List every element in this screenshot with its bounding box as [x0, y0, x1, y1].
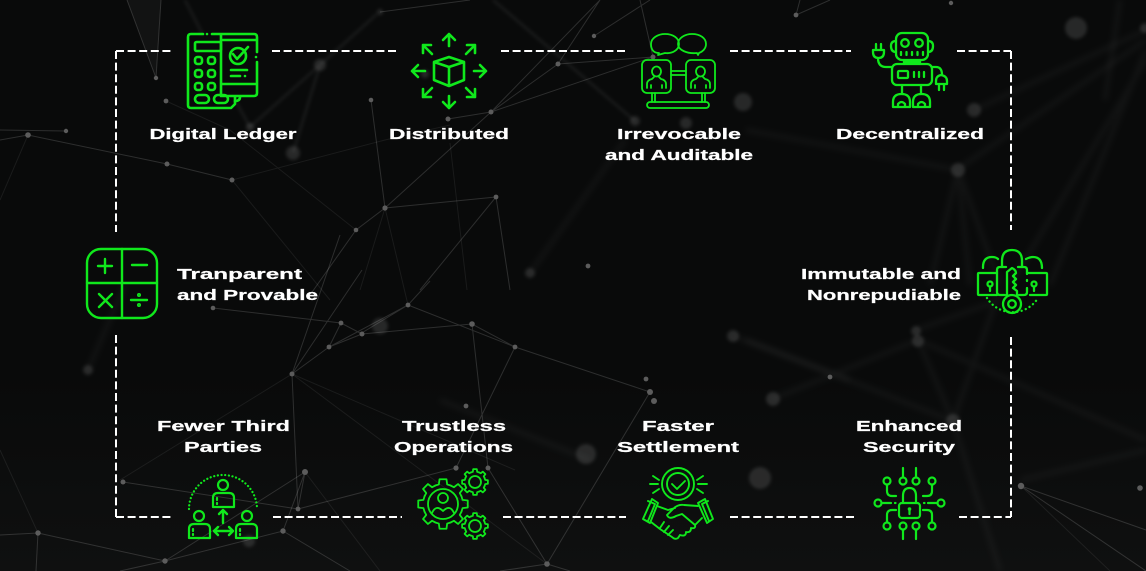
label: Immutable and Nonrepudiable: Nonrepudiable	[807, 288, 961, 304]
icon: locks and key	[978, 250, 1047, 313]
label: Tranparent and Provable: Tranparent	[177, 267, 302, 283]
label: Enhanced Security: Enhanced	[856, 419, 962, 435]
icon: circuit padlock	[874, 468, 944, 539]
label: Tranparent and Provable	[177, 267, 318, 304]
icon: robot	[873, 33, 947, 107]
icon: distributed cube	[412, 34, 486, 108]
label: Digital Ledger: Digital Ledger	[150, 127, 297, 143]
label: Irrevocable and Auditable: Irrevocable	[617, 127, 741, 143]
icon: people talking at table	[642, 34, 715, 108]
label: Irrevocable and Auditable	[605, 127, 753, 164]
icon: gears with person	[418, 469, 488, 539]
label: Faster Settlement: Settlement	[617, 440, 739, 456]
label: Irrevocable and Auditable: and Auditable	[605, 148, 753, 164]
icon: calculator symbols	[87, 249, 157, 318]
label: Faster Settlement: Faster	[642, 419, 715, 435]
label: Fewer Third Parties	[157, 419, 290, 456]
label: Trustless Operations: Trustless	[402, 419, 506, 435]
label: Enhanced Security	[856, 419, 962, 456]
label: Decentralized: Decentralized	[836, 127, 984, 143]
label: Tranparent and Provable: and Provable	[177, 288, 318, 304]
dashed frame	[116, 51, 1011, 517]
icon: three people	[189, 475, 257, 538]
label: Trustless Operations	[394, 419, 513, 456]
icon: handshake with badge	[643, 468, 713, 539]
label: Fewer Third Parties: Fewer Third	[157, 419, 290, 435]
label: Immutable and Nonrepudiable	[801, 267, 961, 304]
icon: digital ledger	[188, 33, 257, 108]
label: Fewer Third Parties: Parties	[184, 440, 262, 456]
label: Enhanced Security: Security	[863, 440, 955, 456]
label: Faster Settlement	[617, 419, 739, 456]
label: Distributed: Distributed	[389, 127, 509, 143]
label: Immutable and Nonrepudiable: Immutable and	[801, 267, 961, 283]
label: Trustless Operations: Operations	[394, 440, 513, 456]
